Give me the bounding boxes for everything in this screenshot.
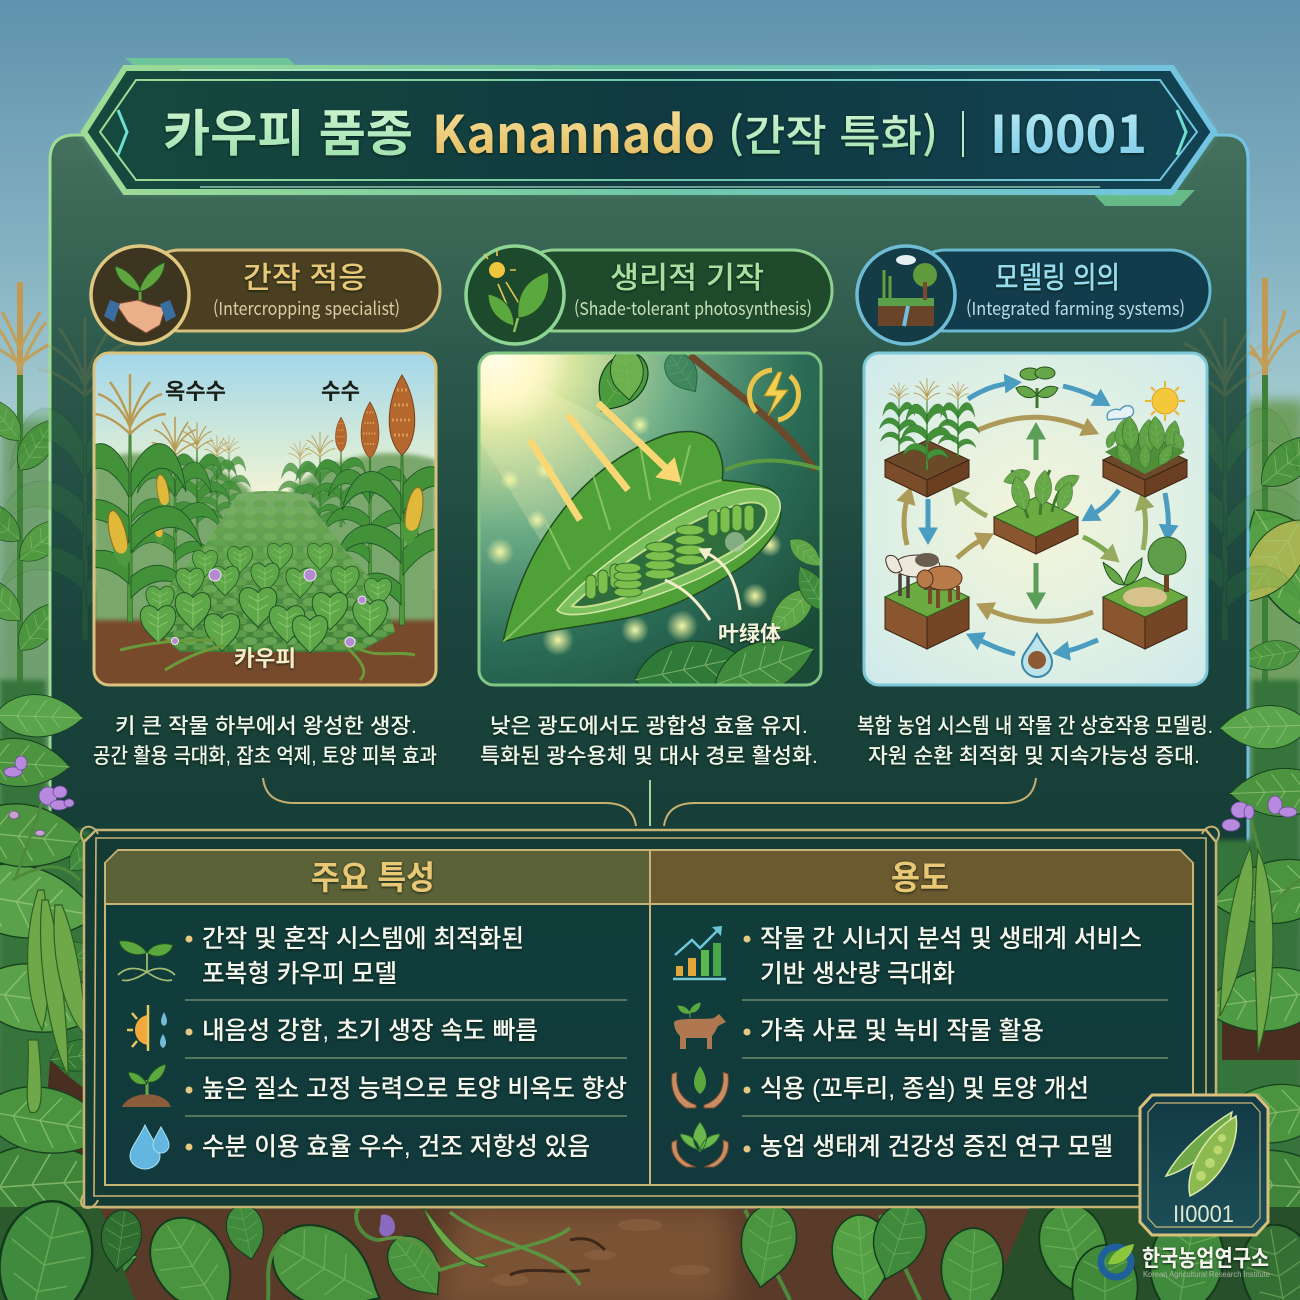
title text: (간작 특화) — [728, 102, 938, 164]
traits list — [118, 925, 627, 1169]
use 2: livestock feed — [674, 1003, 1044, 1049]
left flowers — [4, 756, 74, 836]
left side corn plant — [0, 282, 77, 710]
label: chloroplast: 叶绿体 — [718, 623, 781, 646]
title banner — [82, 58, 1215, 206]
use 3: food and soil improvement — [672, 1066, 1089, 1108]
title text — [163, 93, 1147, 168]
caption: physiology — [480, 715, 818, 768]
logo emblem — [1101, 1244, 1134, 1277]
left pods — [27, 890, 85, 1113]
connector lines — [263, 778, 1036, 826]
corn block — [879, 378, 980, 497]
caption: intercropping: 키 큰 작물 하부에서 왕성한 생장. — [115, 715, 417, 738]
use 4: agro-ecosystem health — [672, 1122, 1113, 1167]
side foliage: left — [0, 680, 144, 1300]
trait 1: intercropping model — [118, 925, 524, 988]
label: cowpea: 카우피 — [234, 646, 296, 671]
pill icon: handshake and sprout — [91, 246, 189, 344]
pill icon: farm system cross-section — [857, 246, 955, 344]
pill icon: sun and leaf — [466, 246, 564, 344]
logo: research institute: Korean Agricultural Research Institute — [1143, 1270, 1271, 1279]
pill: intercropping adaptation: (Intercropping specialist) — [213, 295, 400, 321]
uses list — [672, 925, 1142, 1167]
top seedling — [1016, 367, 1058, 408]
table panel — [81, 827, 1219, 1208]
icon: cowpea pods — [1166, 1112, 1237, 1196]
trait 4: water use efficiency: 수분 이용 효율 우수, 건조 저항성 있음 — [202, 1133, 590, 1161]
tree and soil block — [1103, 537, 1187, 649]
use 1: synergy analysis: 작물 간 시너지 분석 및 생태계 서비스 — [760, 925, 1142, 953]
pill: physiological mechanism: (Shade-tolerant photosynthesis) — [574, 295, 812, 321]
use 1: synergy analysis: 기반 생산량 극대화 — [760, 960, 955, 988]
right side corn plant — [1225, 278, 1300, 710]
centre cowpea block — [994, 466, 1083, 554]
pill: modelling significance — [857, 246, 1210, 344]
trait 2: shade tolerance: 내음성 강함, 초기 생장 속도 빠름 — [202, 1017, 538, 1045]
use 3: food and soil improvement: 식용 (꼬투리, 종실) 및 토양 개선 — [760, 1075, 1089, 1103]
sun and cloud — [1107, 381, 1185, 421]
illustration: integrated farming cycle — [864, 353, 1207, 685]
pill: intercropping adaptation: 간작 적응 — [243, 262, 367, 295]
bottom foliage and vines — [0, 1191, 1300, 1300]
label: corn: 옥수수 — [165, 379, 226, 404]
title text: 카우피 품종 — [163, 94, 413, 166]
background: soil — [0, 1190, 1300, 1300]
trait 4: water use efficiency — [130, 1125, 590, 1169]
use 4: agro-ecosystem health: 농업 생태계 건강성 증진 연구 모델 — [760, 1133, 1113, 1161]
side foliage: right — [1155, 680, 1300, 1300]
illustration: intercropping field — [92, 352, 438, 686]
cycle arrows — [904, 383, 1168, 654]
use 2: livestock feed: 가축 사료 및 녹비 작물 활용 — [760, 1017, 1044, 1045]
title text: Kanannado — [432, 93, 715, 168]
trait 1: intercropping model: 포복형 카우피 모델 — [202, 960, 397, 988]
table heading: key traits — [106, 851, 650, 904]
pill: physiological mechanism: 생리적 기작 — [610, 262, 764, 295]
table heading: uses — [650, 851, 1192, 904]
trait 2: shade tolerance — [127, 1005, 538, 1051]
logo: research institute: 한국농업연구소 — [1142, 1245, 1269, 1271]
caption: intercropping: 공간 활용 극대화, 잡초 억제, 토양 피복 효과 — [93, 745, 437, 768]
caption: physiology: 낮은 광도에서도 광합성 효율 유지. — [490, 715, 808, 738]
energy cycle icon — [749, 370, 799, 420]
use 1: synergy analysis — [673, 925, 1142, 988]
trait 3: nitrogen fixation — [122, 1064, 627, 1107]
caption: intercropping — [93, 715, 437, 768]
right flowers — [1222, 796, 1297, 831]
water drop — [1022, 634, 1052, 677]
caption: modelling: 자원 순환 최적화 및 지속가능성 증대. — [868, 745, 1200, 768]
table heading: uses: 용도 — [891, 859, 949, 896]
caption: physiology: 특화된 광수용체 및 대사 경로 활성화. — [480, 745, 818, 768]
pill: physiological mechanism — [466, 246, 832, 344]
vines and pod — [379, 1207, 580, 1285]
livestock block — [885, 553, 969, 649]
trait 3: nitrogen fixation: 높은 질소 고정 능력으로 토양 비옥도 향상 — [202, 1075, 627, 1103]
mixed crop block — [1103, 415, 1187, 497]
logo: research institute — [1101, 1244, 1271, 1279]
badge: variety code — [1140, 1095, 1268, 1235]
pill: modelling significance: 모델링 의의 — [995, 262, 1120, 295]
trait 1: intercropping model: 간작 및 혼작 시스템에 최적화된 — [202, 925, 524, 953]
illustration: shade-tolerant photosynthesis leaf — [478, 352, 822, 686]
right pods — [1220, 848, 1273, 1052]
caption: modelling: 복합 농업 시스템 내 작물 간 상호작용 모델링. — [857, 715, 1213, 738]
badge: variety code: II0001 — [1173, 1201, 1234, 1228]
label: sorghum: 수수 — [321, 379, 360, 404]
pill: intercropping adaptation — [91, 246, 440, 344]
pill: modelling significance: (Integrated farming systems) — [966, 295, 1185, 321]
caption: modelling — [857, 715, 1213, 768]
title text: II0001 — [990, 93, 1147, 168]
table heading: key traits: 주요 특성 — [311, 859, 435, 896]
